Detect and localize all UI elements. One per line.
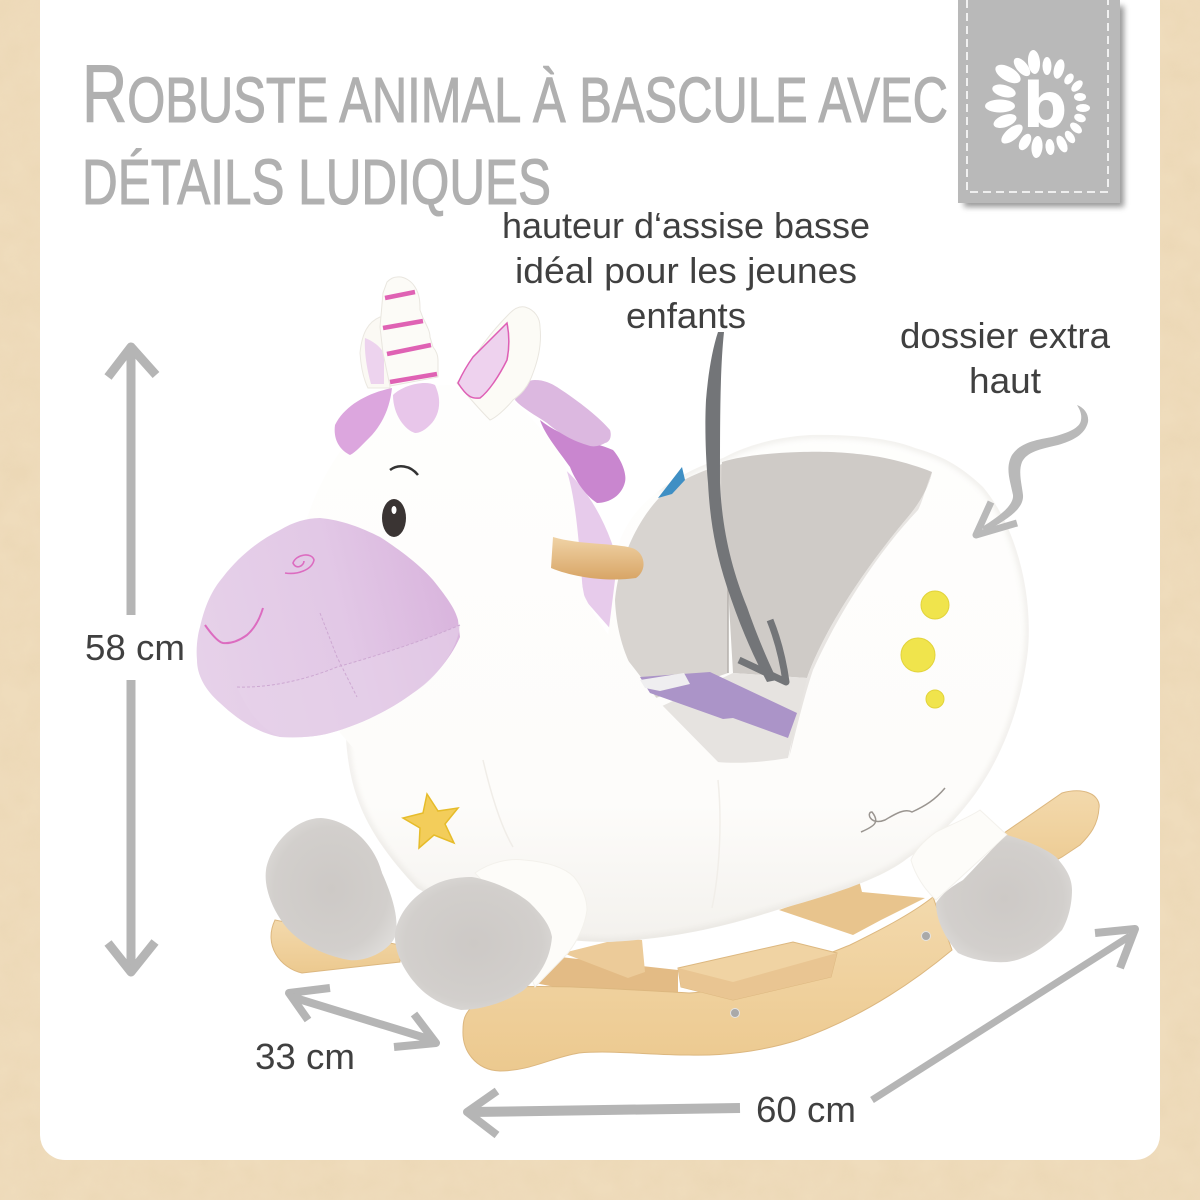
- title: DÉTAILS LUDIQUES: [82, 146, 551, 218]
- brand logo tag: b: [1023, 69, 1067, 142]
- muzzle: [197, 518, 460, 737]
- yellow dots: [901, 591, 949, 708]
- handle: [551, 537, 644, 580]
- callout: seat height: idéal pour les jeunes: [515, 250, 857, 291]
- callout: seat height: hauteur d‘assise basse: [502, 205, 870, 246]
- back right leg: [911, 810, 1072, 962]
- front rocker: [463, 897, 952, 1071]
- callout: seat height: [502, 205, 870, 336]
- callout: seat height: enfants: [626, 295, 746, 336]
- arrow: seat height: [705, 332, 786, 682]
- dimension: depth: 33 cm: [255, 1036, 355, 1077]
- white body: [346, 435, 1029, 942]
- brand logo tag: [958, 0, 1124, 207]
- dimension: depth: [255, 988, 436, 1077]
- callout: high backrest: haut: [969, 360, 1041, 401]
- seat interior: [615, 452, 932, 763]
- callout: high backrest: [900, 315, 1111, 401]
- right ear: [457, 307, 541, 420]
- arrow: high backrest: [976, 405, 1088, 535]
- blue tag: [658, 467, 685, 498]
- mane back: [515, 380, 626, 642]
- dimension: height: 58 cm: [85, 627, 185, 668]
- title: [82, 49, 948, 218]
- forelock: [335, 383, 439, 455]
- rocking horse unicorn: [197, 277, 1099, 1071]
- icon: sunflower b logo: [985, 50, 1090, 158]
- rear rocker: [271, 791, 1099, 996]
- screws: [730, 932, 930, 1018]
- head and neck: [305, 385, 722, 908]
- foot rest: [678, 942, 837, 1000]
- dimension: width: [467, 929, 1135, 1135]
- callout: high backrest: dossier extra: [900, 315, 1111, 356]
- signature: [861, 788, 945, 832]
- dimension: width: 60 cm: [756, 1089, 856, 1130]
- title: ROBUSTE ANIMAL À BASCULE AVEC: [82, 49, 948, 140]
- back left paw: [266, 818, 397, 960]
- purple strap: [640, 672, 797, 738]
- horn and left ear: [360, 277, 438, 388]
- dimension: height: [85, 347, 185, 972]
- eye and brow: [382, 466, 418, 537]
- star: [403, 794, 458, 848]
- front leg and paw: [395, 860, 587, 1010]
